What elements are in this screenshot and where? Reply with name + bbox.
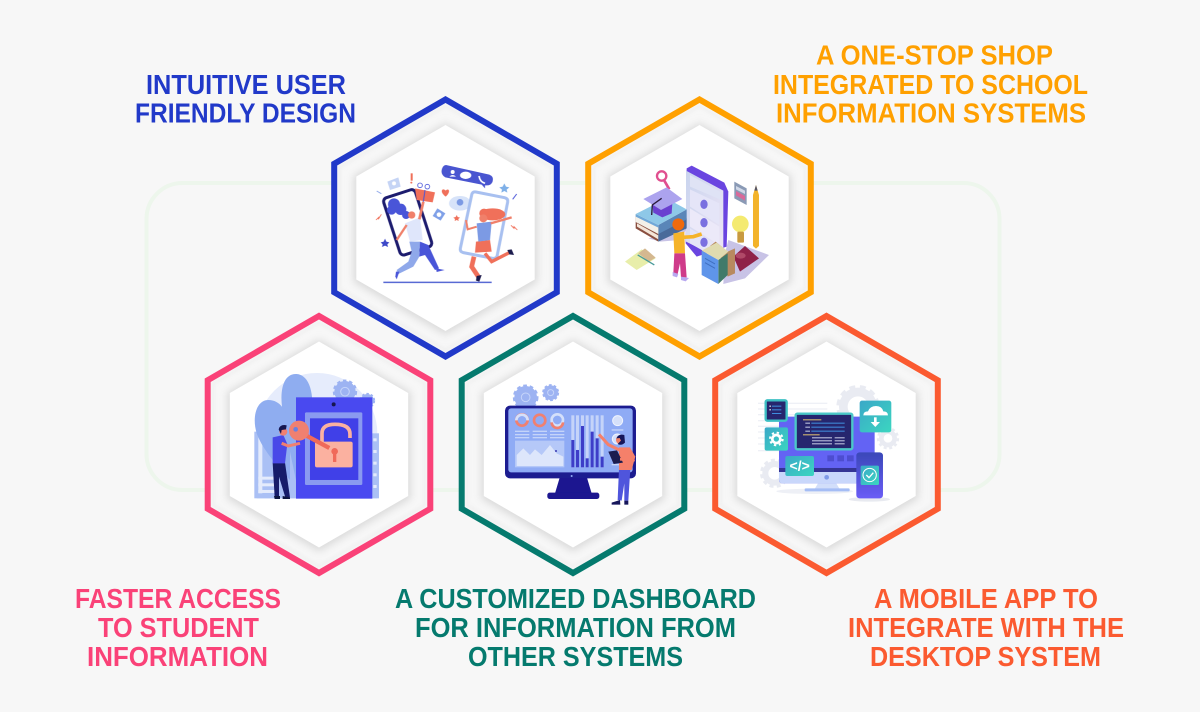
icon: books, phone and student [625,166,769,284]
connector frame [146,183,1000,490]
panel: faster access hexagon [208,316,430,573]
heading: one-stop shop: A ONE-STOP SHOP [816,40,1053,70]
heading: one-stop shop: INTEGRATED TO SCHOOL [773,69,1088,100]
heading: mobile app: DESKTOP SYSTEM [870,641,1101,672]
heading: intuitive user friendly design: FRIENDLY DESIGN [135,98,356,128]
panel: intuitive design hexagon [334,100,557,356]
icon: desktop and mobile app [758,387,898,502]
heading: faster access: TO STUDENT [98,612,259,643]
icon: desktop and mobile app: </> [790,457,810,473]
icon: two people in phones [376,165,517,282]
heading: customized dashboard [395,583,756,672]
heading: mobile app: A MOBILE APP TO [874,583,1098,614]
heading: customized dashboard: A CUSTOMIZED DASHBOARD [395,583,756,614]
heading: mobile app: INTEGRATE WITH THE [848,612,1124,643]
heading: faster access: FASTER ACCESS [75,583,281,614]
heading: one-stop shop: INFORMATION SYSTEMS [776,98,1086,128]
panel: customized dashboard hexagon [462,316,684,573]
heading: intuitive user friendly design: INTUITIVE USER [146,69,346,100]
heading: customized dashboard: OTHER SYSTEMS [468,641,683,672]
icon: key and padlock [254,373,379,499]
heading: faster access [75,583,281,672]
heading: intuitive user friendly design [135,69,356,128]
icon: dashboard monitor [505,385,636,505]
panel: mobile app hexagon [715,316,938,573]
heading: mobile app [848,583,1124,672]
heading: customized dashboard: FOR INFORMATION FROM [415,612,736,643]
heading: one-stop shop [773,40,1088,128]
heading: faster access: INFORMATION [87,641,268,672]
panel: one-stop shop hexagon [588,100,811,356]
